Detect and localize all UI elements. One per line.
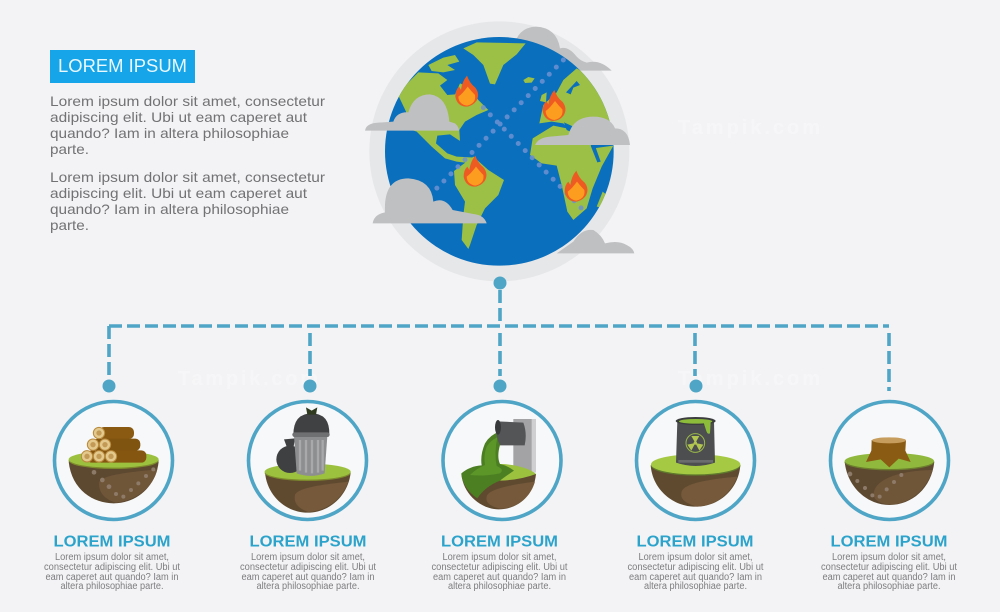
clouds behind globe (514, 27, 634, 253)
description: logs: Lorem ipsum dolor sit amet, (55, 552, 169, 563)
description: radioactive waste: altera philosophiae parte. (644, 581, 747, 592)
icon: floating island with radioactive barrel (651, 417, 740, 507)
icon: floating island with logs (69, 427, 159, 503)
description: toxic spill: altera philosophiae parte. (448, 581, 551, 592)
connector dots (102, 380, 702, 392)
cloud: left (365, 94, 459, 131)
description: logs (44, 552, 180, 592)
text block: paragraph two: adipiscing elit. Ubi ut eam caperet aut (50, 185, 307, 201)
dashed connector tree (109, 290, 889, 391)
icon: floating island with tree stump (845, 437, 934, 505)
title: garbage: LOREM IPSUM (250, 534, 366, 550)
description: radioactive waste: consectetur adipiscing elit. Ubi ut (628, 562, 764, 573)
description: deforestation (821, 552, 957, 592)
continents (397, 42, 613, 249)
title: logs: LOREM IPSUM (54, 534, 170, 550)
description: deforestation: eam caperet aut quando? Iam in (822, 572, 956, 583)
description: radioactive waste: eam caperet aut quando? Iam in (629, 572, 762, 583)
description: logs: consectetur adipiscing elit. Ubi ut (44, 562, 180, 573)
title: toxic spill: LOREM IPSUM (441, 534, 558, 550)
description: deforestation: Lorem ipsum dolor sit amet, (832, 552, 946, 563)
sea details (448, 81, 601, 162)
text block: paragraph one: quando? Iam in altera philosophiae (50, 125, 289, 141)
description: garbage: altera philosophiae parte. (256, 581, 360, 592)
flight paths (437, 60, 588, 215)
text block: paragraph one: adipiscing elit. Ubi ut eam caperet aut (50, 109, 307, 125)
description: garbage: eam caperet aut quando? Iam in (242, 572, 374, 583)
panel: toxic spill (432, 402, 568, 592)
connector dot: globe (494, 276, 506, 290)
text block: paragraph two (50, 169, 325, 233)
cloud: right (535, 117, 630, 145)
panel: logs (44, 402, 180, 592)
description: logs: eam caperet aut quando? Iam in (46, 572, 178, 583)
description: garbage: consectetur adipiscing elit. Ubi ut (240, 562, 376, 573)
description: logs: altera philosophiae parte. (60, 581, 164, 592)
description: toxic spill (432, 552, 568, 592)
description: deforestation: altera philosophiae parte. (838, 581, 940, 592)
description: deforestation: consectetur adipiscing elit. Ubi ut (821, 562, 957, 573)
description: garbage: Lorem ipsum dolor sit amet, (251, 552, 365, 563)
text: Tampik.com (178, 368, 318, 390)
cloud: lower left (373, 178, 487, 223)
text block: paragraph two: quando? Iam in altera philosophiae (50, 201, 289, 217)
description: toxic spill: consectetur adipiscing elit. Ubi ut (432, 562, 568, 573)
text: Tampik.com (678, 368, 820, 390)
panel: garbage (240, 402, 376, 592)
description: toxic spill: Lorem ipsum dolor sit amet, (442, 552, 556, 563)
text block: paragraph one (50, 93, 325, 157)
icon: floating island with trash can (265, 407, 351, 513)
banner heading: LOREM IPSUM (58, 56, 187, 76)
text block: paragraph one: parte. (50, 141, 89, 157)
globe illustration with clouds and fires (365, 21, 634, 281)
fire: South America (464, 156, 486, 187)
description: toxic spill: eam caperet aut quando? Iam in (433, 572, 566, 583)
fire: North America (455, 76, 478, 107)
description: garbage (240, 552, 376, 592)
description: radioactive waste: Lorem ipsum dolor sit amet, (638, 552, 752, 563)
icon: floating island with sludge pipe (461, 419, 536, 509)
text block: paragraph one: Lorem ipsum dolor sit amet, consectetur (50, 93, 325, 109)
description: radioactive waste (628, 552, 764, 592)
fire: Africa (565, 171, 587, 202)
panel: deforestation (821, 402, 957, 592)
ocean (385, 37, 614, 266)
banner heading (50, 50, 195, 83)
text block: paragraph two: parte. (50, 217, 89, 233)
fire: Europe (543, 90, 565, 121)
title: radioactive waste: LOREM IPSUM (636, 534, 754, 550)
text: Tampik.com (678, 117, 820, 139)
title: deforestation: LOREM IPSUM (830, 534, 948, 550)
globe halo (369, 21, 629, 281)
panel: radioactive waste (628, 402, 764, 592)
text block: paragraph two: Lorem ipsum dolor sit amet, consectetur (50, 169, 325, 185)
